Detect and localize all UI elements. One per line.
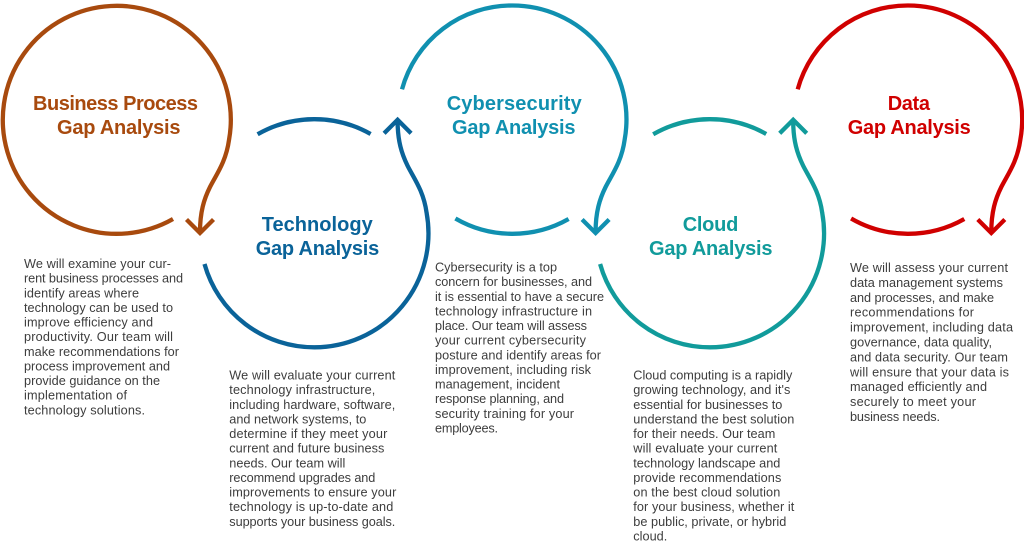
panel: technology gap analysis [204,119,428,529]
panel: cloud gap analysis [600,119,824,543]
heading: business process [33,93,198,139]
text block: business process description: provide guidance on the [24,374,160,388]
text block: cybersecurity description: management, incident [435,378,560,392]
heading: cybersecurity: Gap Analysis [452,117,576,139]
text block: cloud description: cloud. [633,529,667,543]
text block: cybersecurity description: security training for your [435,407,575,421]
circular arrow: cybersecurity [402,5,626,234]
text block: cybersecurity description: employees. [435,421,498,435]
text block: business process description [24,257,183,417]
text block: business process description: improve efficiency and [24,316,153,330]
text block: business process description: technology can be used to [24,301,173,315]
heading: business process: Business Process [33,93,198,115]
text block: cybersecurity description: improvement, including risk [435,363,592,377]
heading: cybersecurity [447,93,583,139]
text block: business process description: implementation of [24,389,127,403]
text block: cybersecurity description: posture and identify areas for [435,348,602,362]
text block: cybersecurity description: your current cybersecurity [435,334,587,348]
heading: technology [256,214,379,260]
text block: data description: data management systems [850,276,1003,290]
text block: technology description [229,368,397,529]
heading: cloud: Gap Analysis [649,238,772,260]
text block: cybersecurity description: place. Our team will assess [435,319,587,333]
text block: data description: and processes, and make [850,291,994,305]
text block: cloud description: for their needs. Our team [633,427,775,441]
heading: data [848,93,971,139]
text block: cybersecurity description: technology infrastructure in [435,304,592,318]
circular arrow: business process [3,6,231,234]
text block: cybersecurity description: response planning, and [435,392,564,406]
text block: data description: managed efficiently and [850,380,987,394]
text block: technology description: technology infrastructure, [229,383,375,397]
text block: data description: and data security. Our team [850,350,1008,364]
heading: data: Gap Analysis [848,117,971,139]
text block: business process description: identify areas where [24,286,139,300]
text block: data description [849,261,1014,424]
heading: technology: Gap Analysis [256,238,379,260]
panel: cybersecurity gap analysis [402,5,626,435]
text block: data description: governance, data quality, [850,336,992,350]
heading: data: Data [888,93,931,115]
heading: technology: Technology [262,214,374,236]
text block: cloud description: be public, private, or hybrid [633,515,786,529]
text block: cybersecurity description: it is essential to have a secure [435,290,604,304]
text block: business process description: technology solutions. [24,403,145,417]
text block: data description: will ensure that your data is [849,365,1009,379]
text block: cybersecurity description: Cybersecurity is a top [435,260,557,274]
text block: technology description: technology is up-to-date and [229,500,393,514]
text block: technology description: supports your business goals. [229,515,395,529]
panel: data gap analysis [798,5,1022,424]
text block: technology description: determine if they meet your [229,427,388,441]
text block: business process description: process improvement and [24,359,170,373]
circular arrow: cloud [600,119,824,347]
heading: cybersecurity: Cybersecurity [447,93,583,115]
text block: data description: recommendations for [850,306,975,320]
text block: cloud description: for your business, whether it [633,500,795,514]
text block: technology description: needs. Our team will [229,456,345,470]
text block: data description: business needs. [850,410,940,424]
text block: cloud description: growing technology, and it's [633,383,790,397]
text block: technology description: current and future business [229,442,384,456]
text block: technology description: recommend upgrades and [229,471,375,485]
text block: cybersecurity description: concern for businesses, and [435,275,592,289]
text block: cybersecurity description [435,260,604,435]
text block: technology description: and network systems, to [229,412,366,426]
text block: cloud description: essential for businesses to [633,398,782,412]
heading: business process: Gap Analysis [57,117,180,139]
text block: business process description: We will examine your cur- [24,257,171,271]
heading: cloud: Cloud [683,214,738,236]
text block: cloud description: technology landscape and [633,456,780,470]
text block: cloud description: on the best cloud solution [633,486,780,500]
text block: cloud description: Cloud computing is a rapidly [633,368,793,382]
heading: cloud [649,214,772,260]
text block: data description: We will assess your current [850,261,1008,275]
circular arrow: data [798,5,1022,234]
text block: cloud description: provide recommendations [633,471,781,485]
panel: business process gap analysis [3,6,231,417]
text block: data description: improvement, including data [850,321,1014,335]
text block: business process description: make recommendations for [24,345,180,359]
text block: cloud description [632,368,795,543]
text block: technology description: improvements to ensure your [229,486,397,500]
text block: data description: securely to meet your [850,395,977,409]
text block: technology description: We will evaluate your current [229,368,396,382]
text block: cloud description: will evaluate your current [632,442,778,456]
circular arrow: technology [204,119,428,347]
text block: technology description: including hardware, software, [229,398,395,412]
text block: business process description: rent business processes and [24,272,183,286]
text block: cloud description: understand the best solution [633,412,794,426]
text block: business process description: productivity. Our team will [24,330,173,344]
